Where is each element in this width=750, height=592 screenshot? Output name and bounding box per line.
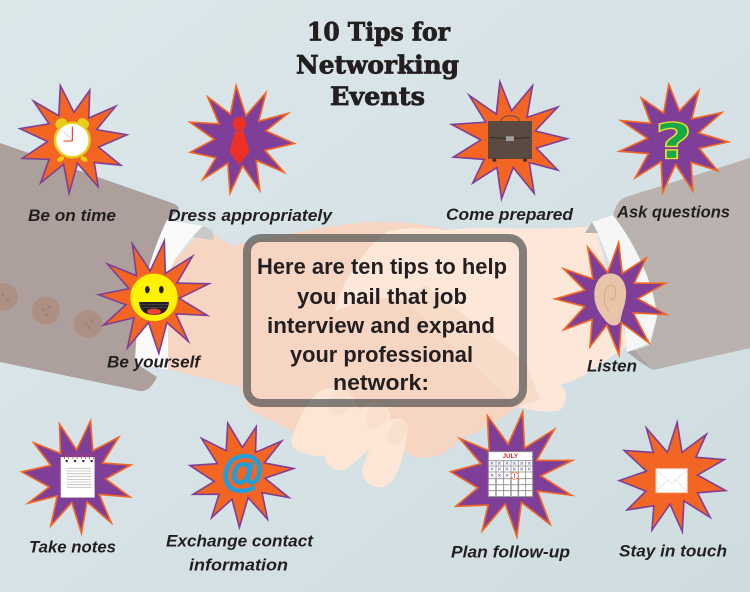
star and calendar icon: ! [514, 474, 516, 480]
tip: listen [555, 242, 666, 376]
tip: exchange contact information [166, 423, 314, 574]
left sleeve [0, 143, 214, 391]
box frame [247, 238, 523, 403]
tip: be on time [20, 86, 127, 225]
right cuff [592, 215, 657, 352]
title [296, 18, 459, 111]
label: Listen [587, 356, 637, 376]
tip: be yourself [99, 241, 209, 372]
fingernails [323, 384, 410, 448]
left jacket [0, 143, 179, 391]
tip: plan follow-up [451, 412, 572, 562]
label: Take notes [29, 538, 116, 556]
box text: network: [333, 370, 429, 395]
central message box [247, 238, 523, 403]
sleeve buttons [0, 283, 102, 338]
star and at sign icon [190, 423, 294, 527]
label: Be on time [28, 206, 116, 225]
cuff shadow [585, 222, 598, 233]
label: Dress appropriately [168, 206, 334, 225]
title: 10 Tips for [307, 18, 451, 46]
box text [257, 254, 507, 395]
star and clock icon [20, 86, 127, 193]
tip: stay in touch [619, 422, 727, 560]
cuff shadow [192, 226, 214, 240]
star and calendar icon [451, 412, 572, 537]
star and at sign icon: @ [222, 447, 264, 495]
label: Ask questions [616, 202, 730, 222]
tip: come prepared [446, 82, 574, 224]
box text: your professional [290, 342, 473, 367]
tip: ask questions [616, 84, 730, 222]
right sleeve [585, 158, 750, 370]
fingers [291, 388, 408, 487]
star and envelope icon [619, 422, 726, 532]
right hand [335, 226, 628, 412]
box text: you nail that job [297, 284, 467, 309]
label: Stay in touch [619, 542, 727, 560]
star and question mark icon: ? [655, 114, 692, 171]
left hand [165, 222, 517, 458]
star and notepad icon [22, 421, 131, 533]
tip: take notes [22, 421, 131, 556]
label: Plan follow-up [451, 542, 570, 562]
tip: dress appropriately [168, 86, 334, 225]
right jacket [613, 158, 750, 370]
handshake illustration [165, 222, 628, 487]
label: Come prepared [446, 205, 574, 224]
label [166, 532, 314, 574]
star and briefcase icon [452, 82, 567, 199]
title: Events [330, 82, 425, 111]
star and calendar icon: JULY [503, 453, 519, 460]
box text: Here are ten tips to help [257, 254, 507, 279]
hand shadow band [405, 285, 540, 407]
label: Exchange contact [166, 532, 314, 550]
star and smiley icon [99, 241, 209, 353]
title: Networking [296, 50, 459, 80]
label: information [189, 556, 288, 574]
left cuff [135, 220, 203, 370]
box text: interview and expand [267, 313, 495, 338]
star and ear icon [555, 242, 666, 355]
label: Be yourself [107, 352, 202, 372]
star and tie icon [190, 86, 294, 193]
